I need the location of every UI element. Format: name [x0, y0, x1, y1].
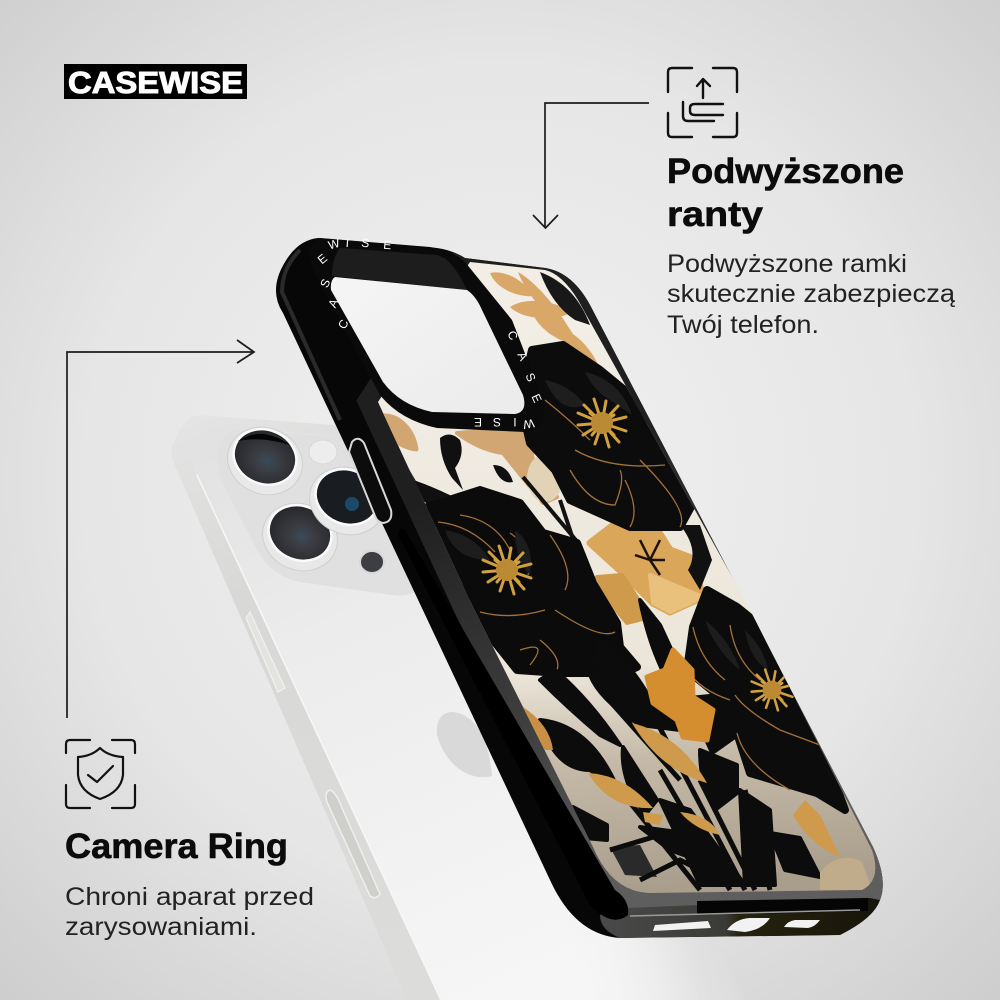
text: camera ring description: zarysowaniami.	[65, 913, 257, 941]
bottom lip	[600, 898, 880, 938]
ring window	[331, 277, 524, 414]
rim highlight	[197, 475, 441, 1000]
lens 2	[252, 492, 348, 582]
top gold foliage	[490, 272, 598, 364]
stamen 2	[483, 546, 531, 594]
ring lettering right: E	[474, 415, 482, 429]
text: camera ring description	[65, 883, 314, 941]
port holes	[653, 918, 820, 932]
ring lettering left: C	[335, 317, 352, 331]
text: raised edges description	[667, 250, 955, 339]
stamen 3	[752, 670, 792, 710]
side button upper	[246, 612, 285, 692]
lower dark foliage	[540, 600, 820, 885]
black flower 1	[520, 345, 692, 527]
ring lettering left: A	[325, 297, 341, 310]
black flower 3	[687, 590, 845, 810]
lens 3	[299, 456, 395, 546]
ring lettering left: W	[327, 236, 342, 252]
heading: Podwyższone ranty: ranty	[667, 195, 764, 234]
logo: CASEWISE: CASEWISE	[68, 65, 243, 100]
ring lettering left: S	[361, 236, 370, 250]
heading: Camera Ring: Camera Ring	[65, 827, 288, 866]
top dark leaf	[540, 272, 590, 325]
arrow: camera ring leader	[67, 340, 254, 718]
ring lettering right: S	[493, 415, 501, 429]
ring lettering left: E	[315, 251, 330, 267]
ring lettering left: E	[383, 238, 392, 252]
ring lettering right: W	[521, 416, 535, 432]
lens 1	[217, 416, 313, 506]
text: raised edges description: Twój telefon.	[667, 311, 819, 339]
phone back	[193, 426, 745, 1000]
orange flower	[647, 650, 713, 740]
camera plateau	[218, 430, 425, 596]
text: raised edges description: skutecznie zabezpieczą	[667, 280, 955, 308]
cream bloom	[527, 456, 560, 502]
ring recess	[332, 248, 467, 290]
leaves right of gold flower	[680, 525, 712, 590]
ring lettering left	[315, 236, 392, 331]
heading: Podwyższone ranty: Podwyższone	[667, 152, 904, 191]
ring outer	[310, 238, 545, 432]
left foliage	[375, 408, 557, 503]
text: raised edges description: Podwyższone ramki	[667, 250, 907, 278]
ring lettering right: I	[513, 415, 517, 429]
heading: Podwyższone ranty	[667, 152, 904, 234]
ring lettering left: I	[345, 236, 350, 250]
lidar	[360, 551, 384, 573]
ring lettering right: A	[515, 350, 531, 363]
phone rim	[171, 415, 745, 1000]
stamen 1	[578, 399, 626, 447]
white phone	[171, 415, 745, 1000]
side slot	[398, 529, 628, 920]
icon: raised edges	[668, 68, 737, 137]
fan of dark stems	[600, 690, 770, 890]
side button lower	[326, 790, 380, 898]
gold flower large	[590, 520, 703, 623]
ring lettering right: S	[523, 371, 539, 384]
text: camera ring description: Chroni aparat przed	[65, 883, 314, 911]
apple logo	[437, 712, 492, 777]
side frame band	[378, 262, 880, 938]
arrow: raised edges leader	[533, 103, 649, 228]
case	[276, 238, 883, 938]
gold leaves lower	[523, 707, 840, 857]
small dark leaves and stems	[409, 434, 513, 503]
ring lettering right: C	[504, 328, 521, 342]
icon: shield	[66, 740, 135, 808]
volume button	[349, 439, 391, 523]
ring lettering right: E	[529, 392, 545, 405]
camera ring	[310, 236, 545, 432]
case gloss	[282, 250, 340, 420]
black flower 2	[427, 490, 637, 673]
case body	[276, 238, 883, 938]
lower shade	[560, 800, 745, 1000]
ring lettering left: S	[317, 277, 333, 290]
artwork ground	[360, 255, 890, 900]
flash	[309, 440, 337, 464]
corner flower	[820, 858, 872, 890]
ring lettering right	[474, 328, 545, 432]
case artwork	[360, 255, 890, 900]
